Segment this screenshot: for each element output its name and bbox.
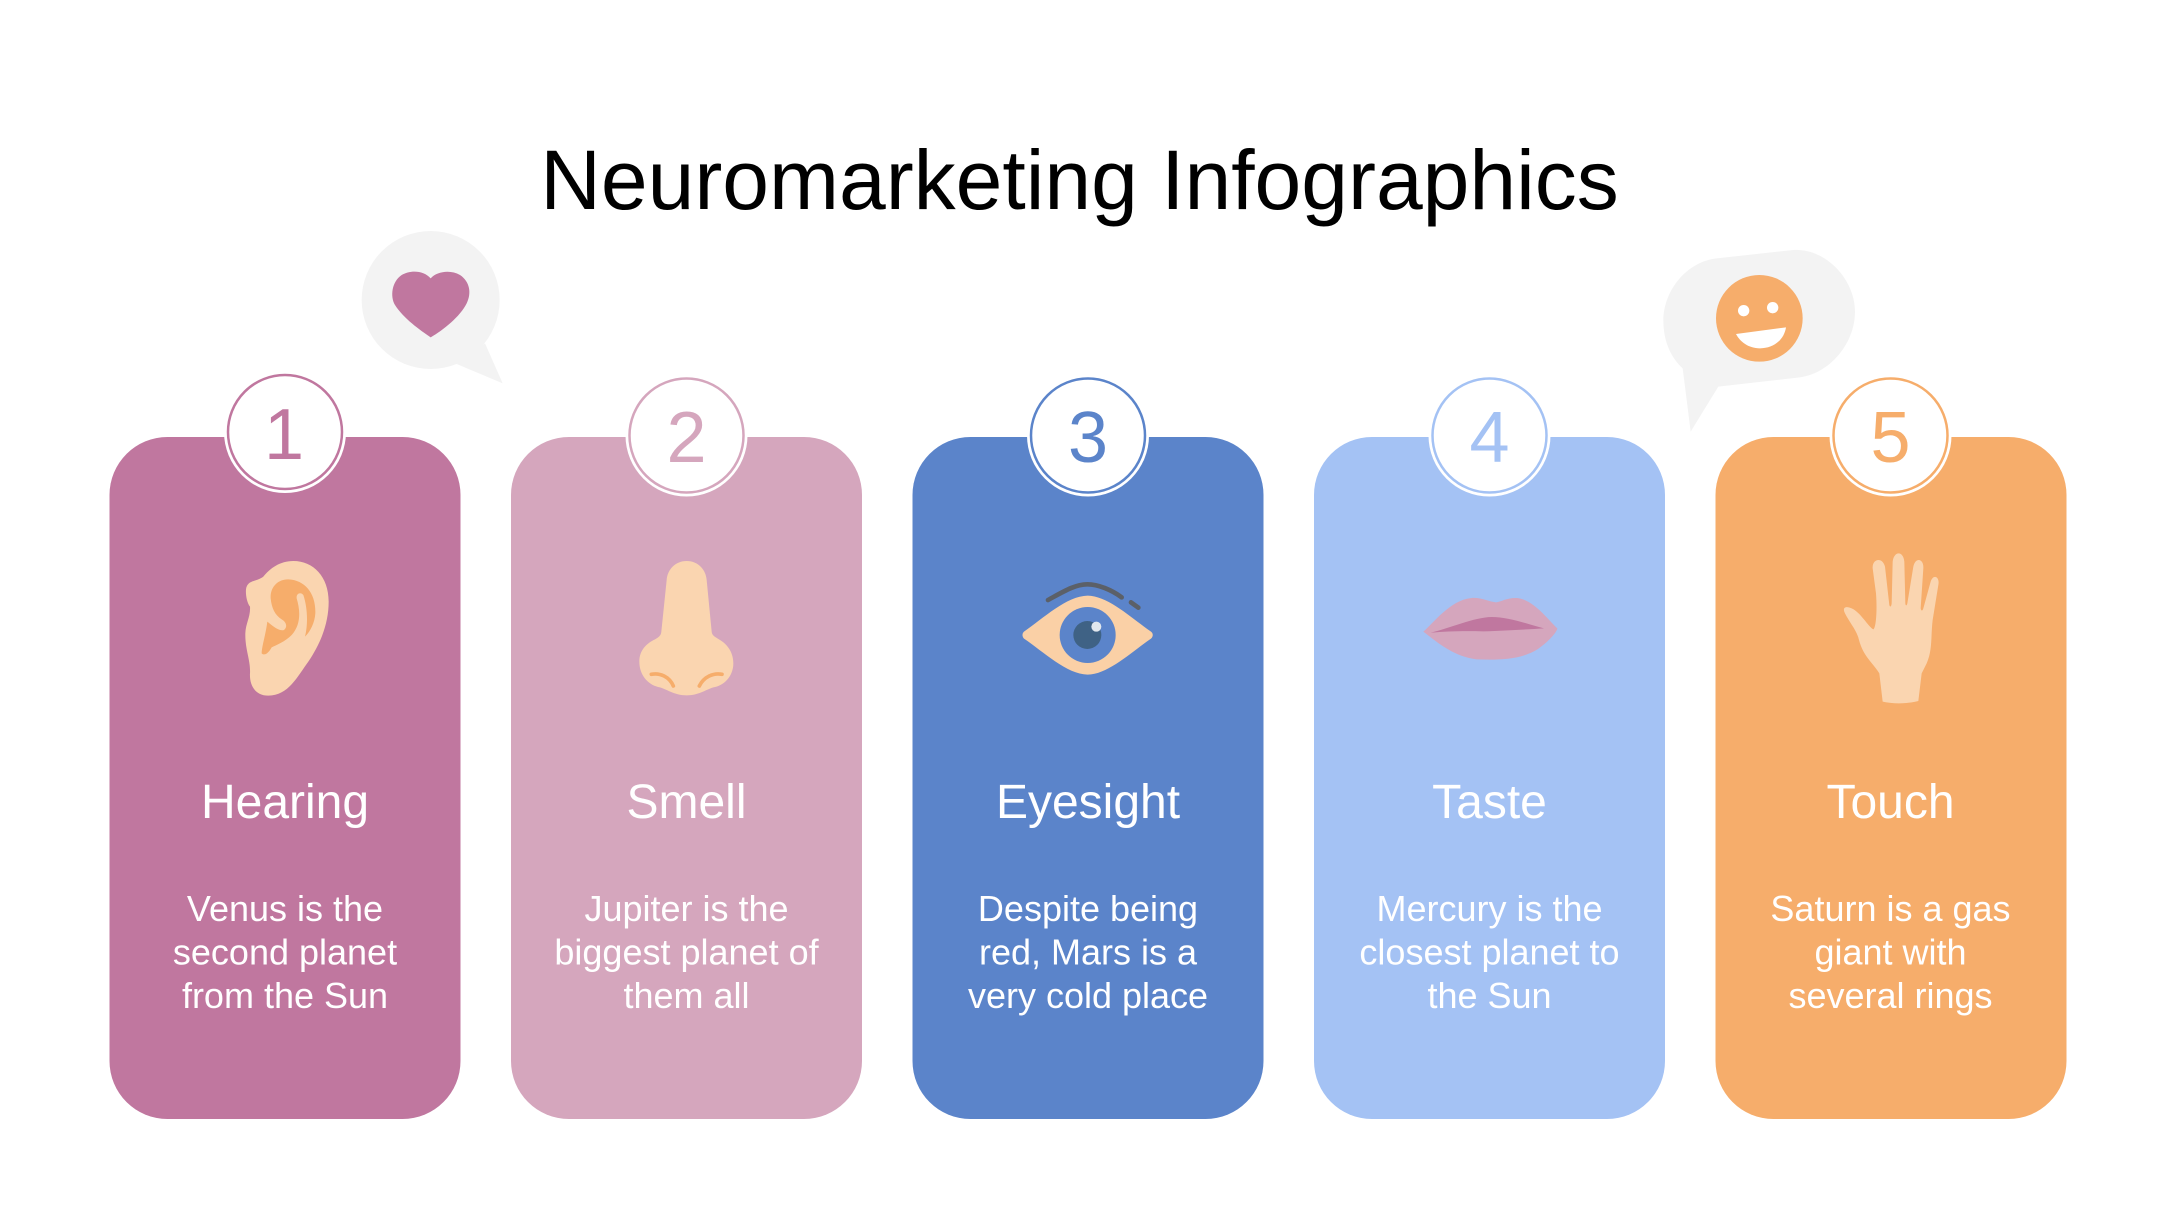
panel: hearing (110, 371, 460, 1119)
icon: nose (639, 561, 733, 695)
heading: taste: Taste (1432, 776, 1547, 829)
number badge 2 (626, 374, 748, 496)
description: taste: closest planet to (1359, 932, 1620, 972)
card background (1716, 437, 2066, 1119)
heading: touch: Touch (1826, 776, 1955, 829)
icon: hand (1844, 553, 1939, 703)
description: hearing: second planet (173, 932, 397, 972)
title: Neuromarketing Infographics (540, 133, 1619, 227)
description: eyesight: red, Mars is a (979, 932, 1198, 972)
description: hearing: Venus is the (187, 888, 383, 929)
description: eyesight: Despite being (978, 888, 1198, 929)
number badge 3: 3 (1068, 398, 1108, 478)
icon: eye (1022, 584, 1153, 675)
number badge 3 (1027, 374, 1149, 496)
description: hearing: from the Sun (182, 975, 388, 1016)
speech bubble: smiley (1663, 250, 1855, 432)
description: touch: several rings (1788, 975, 1993, 1016)
icon: lips (1423, 598, 1557, 660)
description: touch: giant with (1814, 932, 1967, 972)
number badge 1: 1 (264, 395, 304, 475)
number badge 1 (224, 371, 346, 493)
number badge 4: 4 (1469, 398, 1510, 478)
panel: touch (1716, 374, 2066, 1119)
card background (110, 437, 460, 1119)
description: smell: Jupiter is the (584, 888, 789, 929)
description: eyesight: very cold place (968, 975, 1208, 1016)
card background (511, 437, 862, 1119)
number badge 2: 2 (666, 398, 707, 478)
panel: smell (511, 374, 862, 1119)
description: touch: Saturn is a gas (1770, 888, 2011, 929)
speech bubble: heart (362, 231, 503, 383)
description: smell: biggest planet of (554, 932, 820, 972)
number badge 5 (1830, 374, 1952, 496)
number badge 5: 5 (1870, 398, 1911, 478)
description: smell: them all (623, 975, 750, 1016)
description: taste: Mercury is the (1376, 888, 1603, 929)
description: taste: the Sun (1427, 975, 1552, 1016)
panel: taste (1314, 374, 1665, 1119)
panel: eyesight (912, 374, 1264, 1119)
heading: eyesight: Eyesight (996, 776, 1180, 829)
number badge 4 (1428, 374, 1550, 496)
icon: ear (245, 561, 329, 696)
card background (1314, 437, 1665, 1119)
card background (912, 437, 1264, 1119)
heading: hearing: Hearing (201, 776, 369, 829)
heading: smell: Smell (626, 776, 747, 829)
